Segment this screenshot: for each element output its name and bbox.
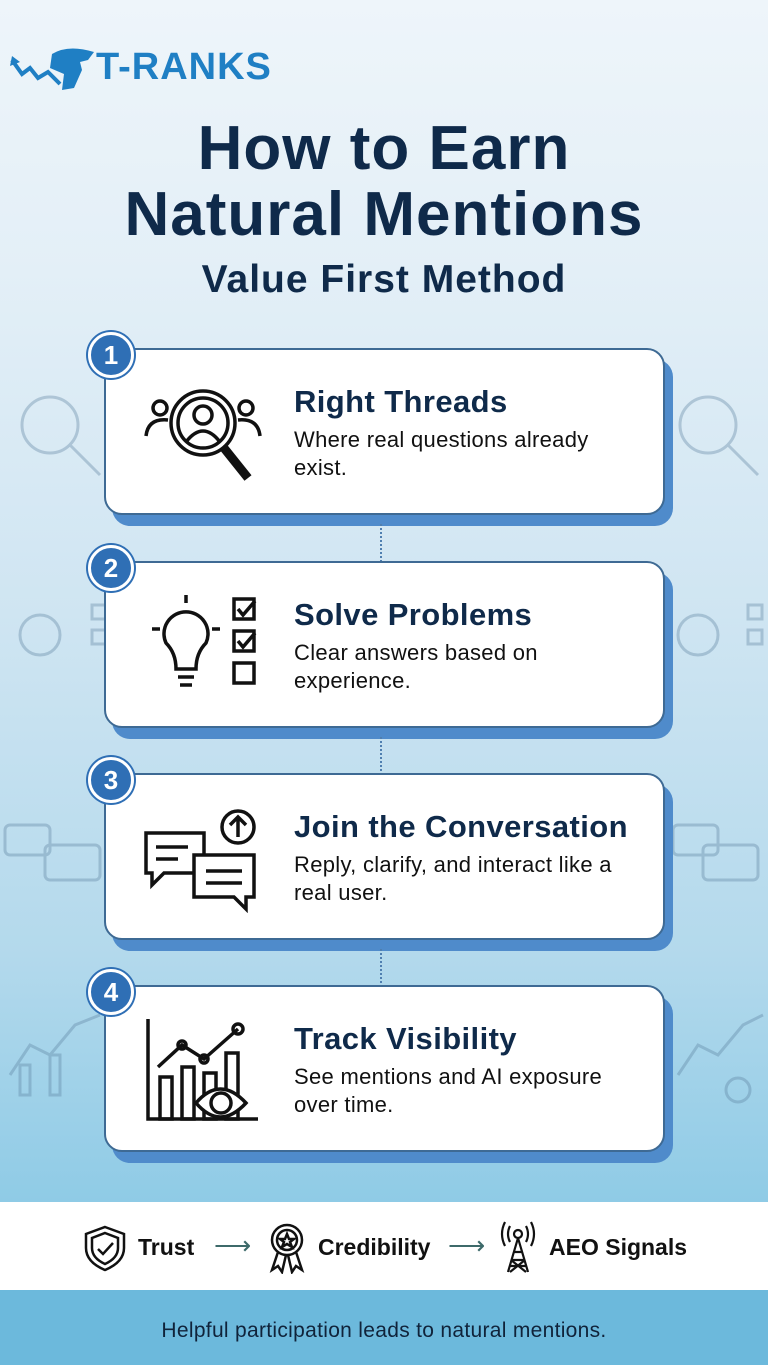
title: [125, 114, 643, 249]
arrow: ⟶: [214, 1230, 251, 1260]
number 1: 1: [104, 340, 118, 370]
ghost icons left: [4, 396, 104, 1096]
arrow: ⟶: [448, 1230, 485, 1260]
bottom benefits band: [0, 1202, 768, 1290]
heading: Right Threads: [294, 384, 508, 419]
label credibility: Credibility: [318, 1234, 430, 1260]
icon: shield: [84, 1226, 126, 1272]
icon: award: [270, 1224, 304, 1274]
text: See mentions and AI exposure over time.: [294, 1064, 602, 1117]
number 2: 2: [104, 553, 118, 583]
card 3: [104, 773, 665, 940]
logo: [10, 46, 272, 90]
footer text: Helpful participation leads to natural mentions.: [161, 1319, 607, 1342]
icon: chat bubbles: [144, 809, 256, 913]
icon: magnifier people: [144, 389, 262, 481]
card 1: [104, 348, 665, 515]
number 2: [88, 545, 134, 591]
icon: signal tower: [500, 1222, 536, 1273]
arrow 3: [380, 949, 392, 987]
logo: T-RANKS: [96, 46, 272, 88]
arrow 1: [380, 524, 392, 562]
number 3: [88, 757, 134, 803]
heading: Track Visibility: [294, 1021, 517, 1056]
label aeo: AEO Signals: [549, 1234, 687, 1260]
number 1: [88, 332, 134, 378]
text: Where real questions already exist.: [294, 427, 589, 480]
number 3: 3: [104, 765, 118, 795]
card 2: [104, 561, 665, 728]
card 4: [104, 985, 665, 1152]
ghost icons right: [673, 396, 764, 1104]
text: Reply, clarify, and interact like a real user.: [294, 852, 612, 905]
number 4: 4: [104, 977, 118, 1007]
subtitle: Value First Method: [202, 258, 566, 301]
title: Natural Mentions: [125, 180, 643, 249]
heading: Join the Conversation: [294, 809, 628, 844]
footer band: [0, 1290, 768, 1365]
heading: Solve Problems: [294, 597, 532, 632]
title: How to Earn: [198, 114, 570, 183]
arrow 2: [380, 737, 392, 775]
icon: bulb checklist: [152, 595, 256, 687]
icon: chart eye: [146, 1019, 258, 1121]
text: Clear answers based on experience.: [294, 640, 538, 693]
number 4: [88, 969, 134, 1015]
label trust: Trust: [138, 1234, 194, 1260]
